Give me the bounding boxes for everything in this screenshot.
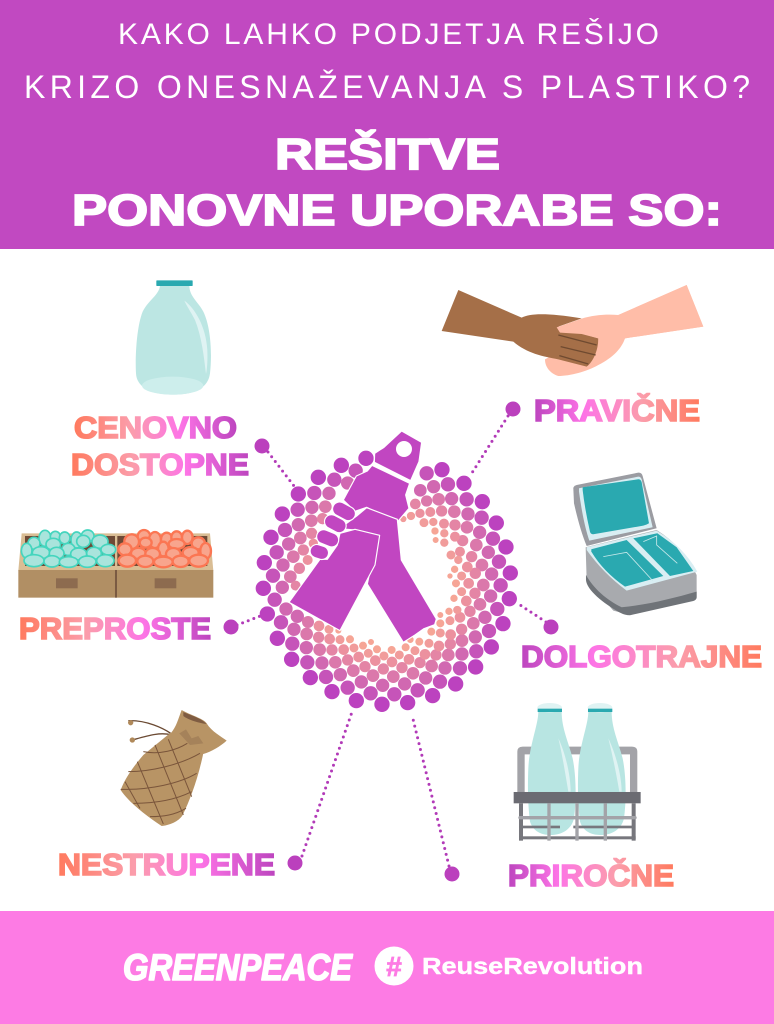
title: line 2: PONOVNE UPORABE SO: xyxy=(72,186,722,235)
panel: footer xyxy=(0,911,774,1024)
icon: hashtag badge: # xyxy=(386,951,402,982)
dot ring 7 xyxy=(325,512,466,660)
dot ring 8 xyxy=(336,528,460,654)
label: nestrupene: NESTRUPENE xyxy=(58,847,275,882)
finger 3 xyxy=(315,528,341,549)
icon: lunch box xyxy=(573,473,697,615)
hashtag text: ReuseRevolution xyxy=(422,953,643,979)
dot ring 1 xyxy=(256,451,518,712)
teal fruit xyxy=(21,530,116,567)
heading: question line 2: KRIZO ONESNAŽEVANJA S PLASTIKO? xyxy=(24,69,750,105)
label: preproste: PREPROSTE xyxy=(19,611,211,646)
icon: milk bottles in carrier xyxy=(514,703,641,841)
bottle lower body xyxy=(289,529,380,631)
finger 2 xyxy=(322,512,349,535)
chart: ring of dots with bottle and hand xyxy=(256,431,518,712)
label: cenovno dostopne: CENOVNO xyxy=(74,410,237,445)
label: cenovno dostopne xyxy=(71,410,249,482)
icon: hand gripping reusable bottle xyxy=(289,431,436,642)
label: pravične: PRAVIČNE xyxy=(534,392,700,428)
bottle cap xyxy=(374,431,422,481)
panel: header xyxy=(0,0,774,249)
bottle cap hole xyxy=(396,441,412,457)
label: priročne: PRIROČNE xyxy=(508,857,674,893)
connector: end dots xyxy=(224,402,558,882)
label: dolgotrajne: DOLGOTRAJNE xyxy=(521,639,762,674)
finger 4 xyxy=(308,543,330,561)
icon: mesh bag xyxy=(121,710,227,826)
icon: fruit crate xyxy=(18,530,213,598)
finger 1 xyxy=(330,500,358,523)
dot ring 3 xyxy=(276,477,498,691)
title: line 1: REŠITVE xyxy=(275,128,500,179)
dot ring 4 xyxy=(285,494,489,682)
icon: handshake xyxy=(442,285,703,376)
bottle neck and body xyxy=(343,465,410,522)
dot ring 6 xyxy=(303,508,473,667)
connector: dotted lines xyxy=(237,416,546,866)
dot ring 5 xyxy=(291,499,480,674)
icon: hashtag badge xyxy=(374,946,414,986)
logo: greenpeace: GREENPEACE xyxy=(123,947,353,988)
label: cenovno dostopne: DOSTOPNE xyxy=(71,447,249,482)
dot ring 2 xyxy=(266,464,507,701)
heading: question line 1: KAKO LAHKO PODJETJA REŠIJO xyxy=(118,17,659,51)
orange fruit xyxy=(118,530,211,567)
forearm / lower bottle back xyxy=(339,508,436,642)
icon: glass jar xyxy=(136,280,211,395)
